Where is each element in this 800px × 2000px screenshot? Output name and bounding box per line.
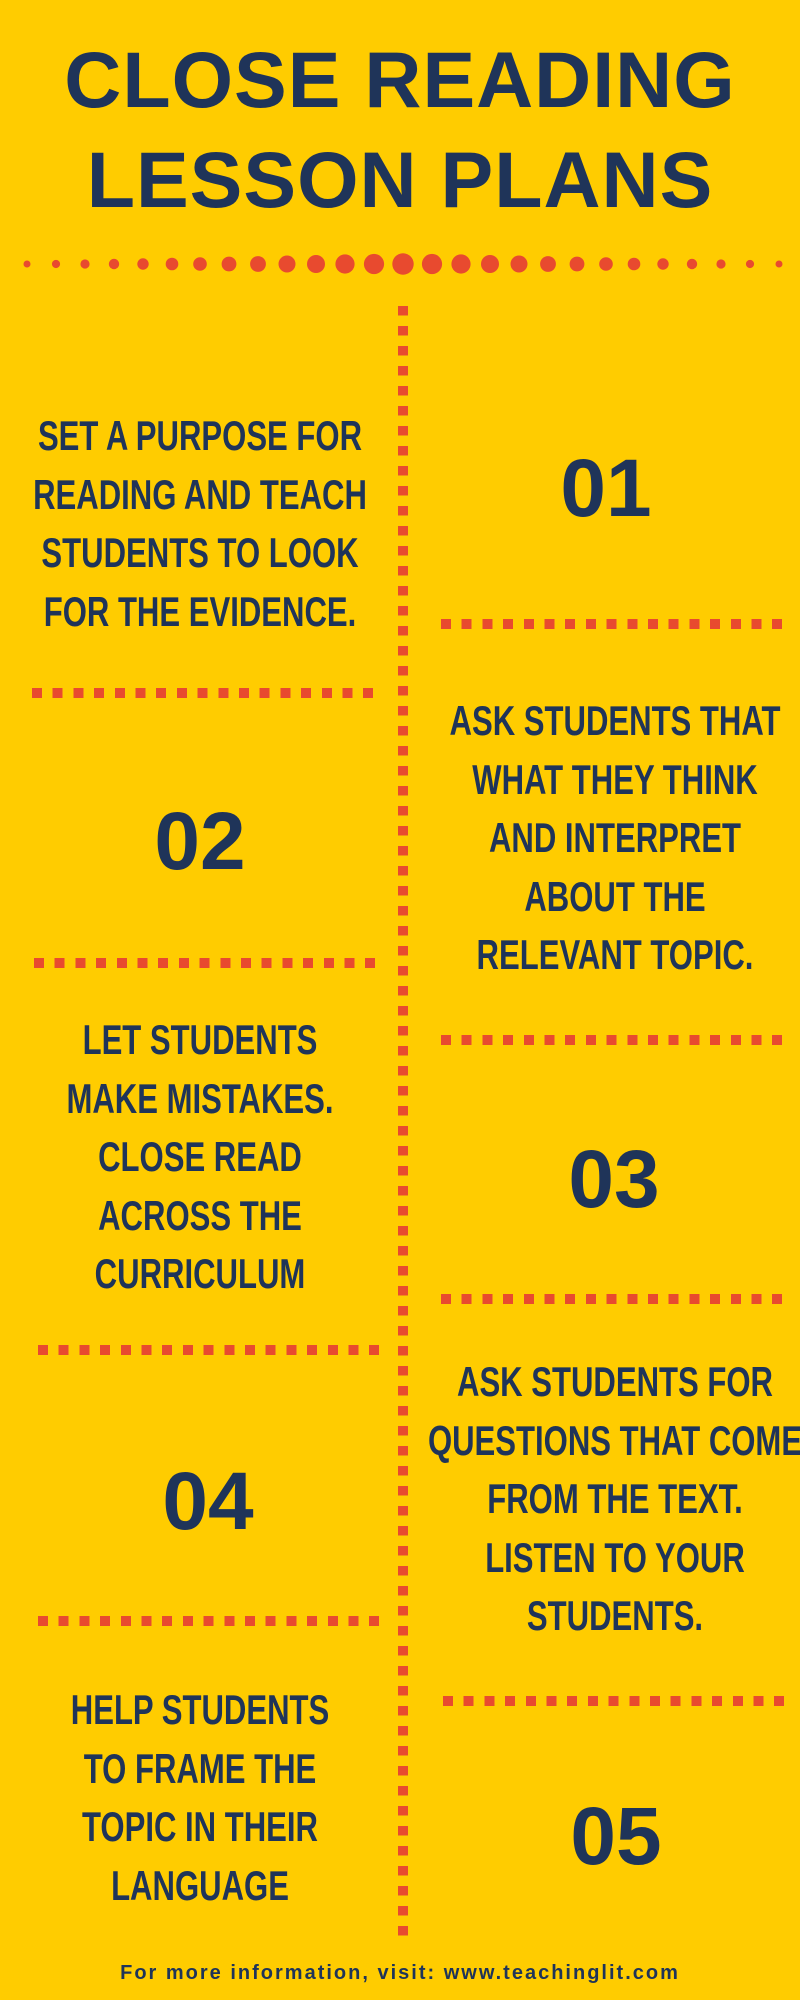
step 3 text: MAKE MISTAKES. bbox=[66, 1074, 334, 1122]
footer: For more information, visit: www.teachinglit.com bbox=[120, 1962, 680, 1984]
step 2 text: ASK STUDENTS THAT bbox=[450, 697, 780, 744]
step 3 text: LET STUDENTS bbox=[83, 1016, 317, 1063]
vertical dashed line bbox=[398, 306, 408, 1940]
step 4 text: FROM THE TEXT. bbox=[487, 1475, 743, 1522]
number 03: 03 bbox=[568, 1134, 660, 1225]
step 5 text: HELP STUDENTS bbox=[71, 1686, 329, 1733]
title bbox=[64, 35, 736, 224]
number 01: 01 bbox=[560, 443, 652, 534]
step 4 text: STUDENTS. bbox=[527, 1592, 703, 1639]
step 3 text bbox=[66, 1016, 334, 1297]
step 1 text: READING AND TEACH bbox=[33, 470, 367, 518]
step 2 text: RELEVANT TOPIC. bbox=[477, 931, 753, 978]
step 1 text: FOR THE EVIDENCE. bbox=[44, 588, 356, 634]
step 3 text: CLOSE READ bbox=[98, 1133, 302, 1180]
dotted divider bbox=[24, 253, 782, 275]
step 1 text bbox=[33, 412, 367, 634]
step 5 text: TO FRAME THE bbox=[84, 1744, 316, 1792]
step 4 text bbox=[428, 1358, 800, 1639]
step 4 text: ASK STUDENTS FOR bbox=[457, 1358, 773, 1405]
step 2 text: ABOUT THE bbox=[524, 872, 706, 920]
number 04: 04 bbox=[162, 1456, 254, 1547]
step 2 text: WHAT THEY THINK bbox=[472, 756, 758, 802]
step 1 text: SET A PURPOSE FOR bbox=[38, 412, 362, 459]
step 2 text: AND INTERPRET bbox=[489, 814, 741, 861]
step 5 text bbox=[71, 1686, 329, 1908]
step 4 text: QUESTIONS THAT COME bbox=[428, 1416, 800, 1464]
step 5 text: LANGUAGE bbox=[111, 1862, 289, 1908]
title: LESSON PLANS bbox=[87, 135, 713, 224]
number 02: 02 bbox=[154, 796, 246, 887]
number 05: 05 bbox=[570, 1791, 662, 1882]
step 5 text: TOPIC IN THEIR bbox=[82, 1803, 318, 1850]
step 2 text bbox=[450, 697, 780, 978]
step 3 text: ACROSS THE bbox=[98, 1192, 302, 1238]
step 4 text: LISTEN TO YOUR bbox=[485, 1534, 745, 1580]
step 3 text: CURRICULUM bbox=[95, 1250, 305, 1297]
title: CLOSE READING bbox=[64, 35, 736, 124]
step 1 text: STUDENTS TO LOOK bbox=[41, 529, 359, 576]
